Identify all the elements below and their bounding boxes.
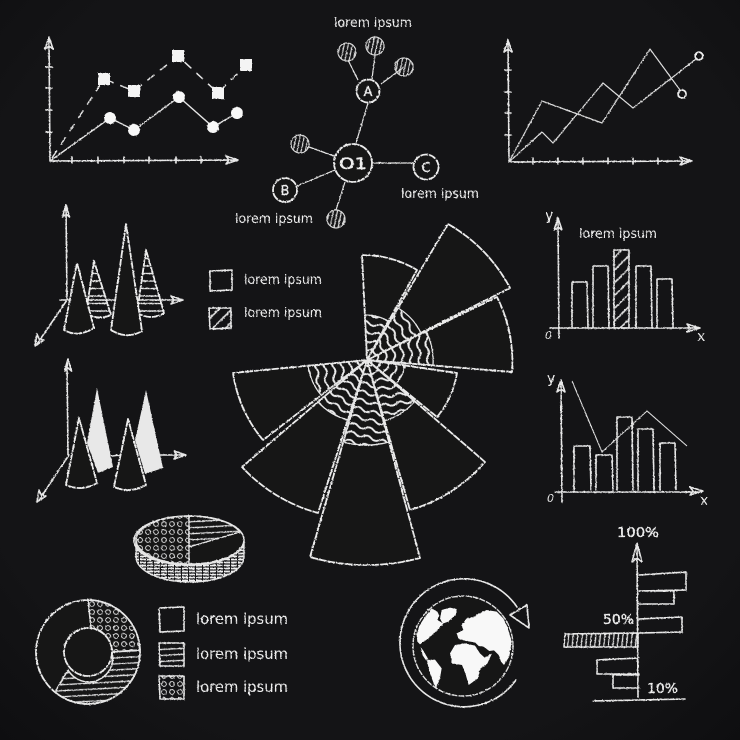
square markers (98, 50, 252, 99)
legend labels (196, 610, 288, 696)
outlined cones (64, 263, 94, 334)
axes (555, 380, 703, 502)
wedge 5 (367, 360, 485, 510)
axis letters (547, 371, 708, 509)
wedge 3 (367, 297, 512, 372)
node labels: A (364, 85, 373, 100)
network captions: lorem ipsum (334, 16, 412, 31)
axes (35, 205, 183, 346)
outlined cones (66, 418, 97, 488)
node labels: B (281, 184, 289, 199)
node labels: C (421, 161, 431, 176)
3D pie chart (134, 516, 244, 582)
donut hole (64, 628, 112, 676)
node labels (281, 85, 431, 199)
network captions: lorem ipsum (401, 187, 479, 202)
globe with circular arrow (400, 579, 529, 707)
horizontal bar chart with percentages (564, 526, 686, 701)
rose chart: central fan (233, 224, 512, 565)
connectors (297, 55, 414, 210)
percent labels: 50% (603, 613, 634, 628)
axis letters: y (545, 208, 553, 224)
network captions: lorem ipsum (235, 212, 313, 227)
axis letters: 0 (547, 492, 554, 505)
hatched segment (55, 650, 140, 704)
wedge 4 (367, 360, 457, 417)
legend swatches (159, 607, 184, 632)
continents (417, 608, 512, 689)
legend labels (244, 273, 322, 321)
globe outline (413, 596, 513, 696)
legend labels: lorem ipsum (196, 678, 288, 696)
bars (574, 417, 676, 490)
percent labels (603, 526, 678, 697)
wedge 2 (367, 224, 510, 360)
axis letters (545, 208, 705, 345)
chart caption: lorem ipsum (579, 227, 657, 242)
circular arrow (400, 579, 529, 707)
axis letters: y (547, 371, 555, 387)
donut chart (36, 600, 140, 704)
axis (593, 543, 685, 701)
axis letters: x (697, 329, 705, 345)
3D cones chart: filled white (37, 359, 186, 502)
end markers (678, 52, 703, 98)
legend labels: lorem ipsum (244, 273, 322, 288)
legend: bottom (159, 607, 288, 699)
line chart: two lines with open ends (504, 40, 703, 165)
network diagram (235, 16, 479, 228)
line chart: squares and circles (45, 37, 252, 164)
wedge 8 (233, 360, 367, 440)
hatched cones (86, 261, 111, 318)
white cones (87, 388, 113, 473)
highlighted hatched bar (614, 250, 629, 328)
bars (597, 572, 686, 688)
wedge 1 (362, 255, 417, 360)
axis letters: 0 (545, 329, 552, 342)
pie side (136, 541, 244, 582)
hatched slice (189, 516, 240, 547)
bar chart: top right (545, 208, 705, 345)
legend: centre (209, 270, 322, 329)
dotted slice (134, 516, 189, 565)
hatched nodes (291, 37, 413, 228)
letter nodes (273, 80, 438, 202)
wedge 6 (310, 360, 420, 565)
percent labels: 10% (647, 682, 678, 697)
axes (550, 218, 700, 338)
axis letters: x (700, 493, 708, 509)
legend swatches (210, 270, 232, 291)
axes (37, 359, 186, 502)
pie top (136, 516, 244, 564)
trend line (572, 381, 687, 452)
legend labels: lorem ipsum (244, 306, 322, 321)
bars (572, 266, 673, 328)
wedge 7 (242, 360, 367, 513)
legend labels: lorem ipsum (196, 610, 288, 628)
bar chart with line: right (547, 371, 708, 509)
axes (504, 40, 692, 165)
circle markers (104, 91, 243, 136)
dotted segment (88, 600, 140, 652)
node labels: O1 (339, 154, 367, 173)
axes (45, 37, 238, 164)
highlighted hatched bar (564, 633, 638, 647)
percent labels: 100% (617, 526, 659, 541)
network captions (235, 16, 479, 227)
3D cones chart: outlined and hatched (35, 205, 183, 346)
legend labels: lorem ipsum (196, 645, 288, 663)
